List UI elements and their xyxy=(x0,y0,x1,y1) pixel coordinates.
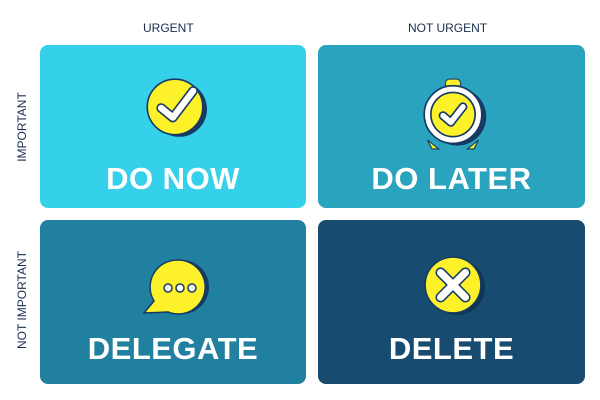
header: urgent: URGENT xyxy=(143,21,194,35)
label: do later: DO LATER xyxy=(371,161,532,196)
header: not urgent: NOT URGENT xyxy=(408,21,487,35)
side label: not important: NOT IMPORTANT xyxy=(15,251,29,349)
panel: do later xyxy=(318,45,585,208)
panel: do now xyxy=(40,45,306,208)
label: delete: DELETE xyxy=(389,331,514,366)
icon: speech bubble xyxy=(142,259,209,315)
label: do now: DO NOW xyxy=(106,161,240,196)
panel: delegate xyxy=(40,220,306,384)
panel: delete xyxy=(318,220,585,384)
label: delegate: DELEGATE xyxy=(88,331,258,366)
side label: important: IMPORTANT xyxy=(15,92,29,162)
icon: x circle xyxy=(424,256,485,315)
icon: check circle xyxy=(146,78,207,137)
icon: alarm clock xyxy=(423,78,486,150)
